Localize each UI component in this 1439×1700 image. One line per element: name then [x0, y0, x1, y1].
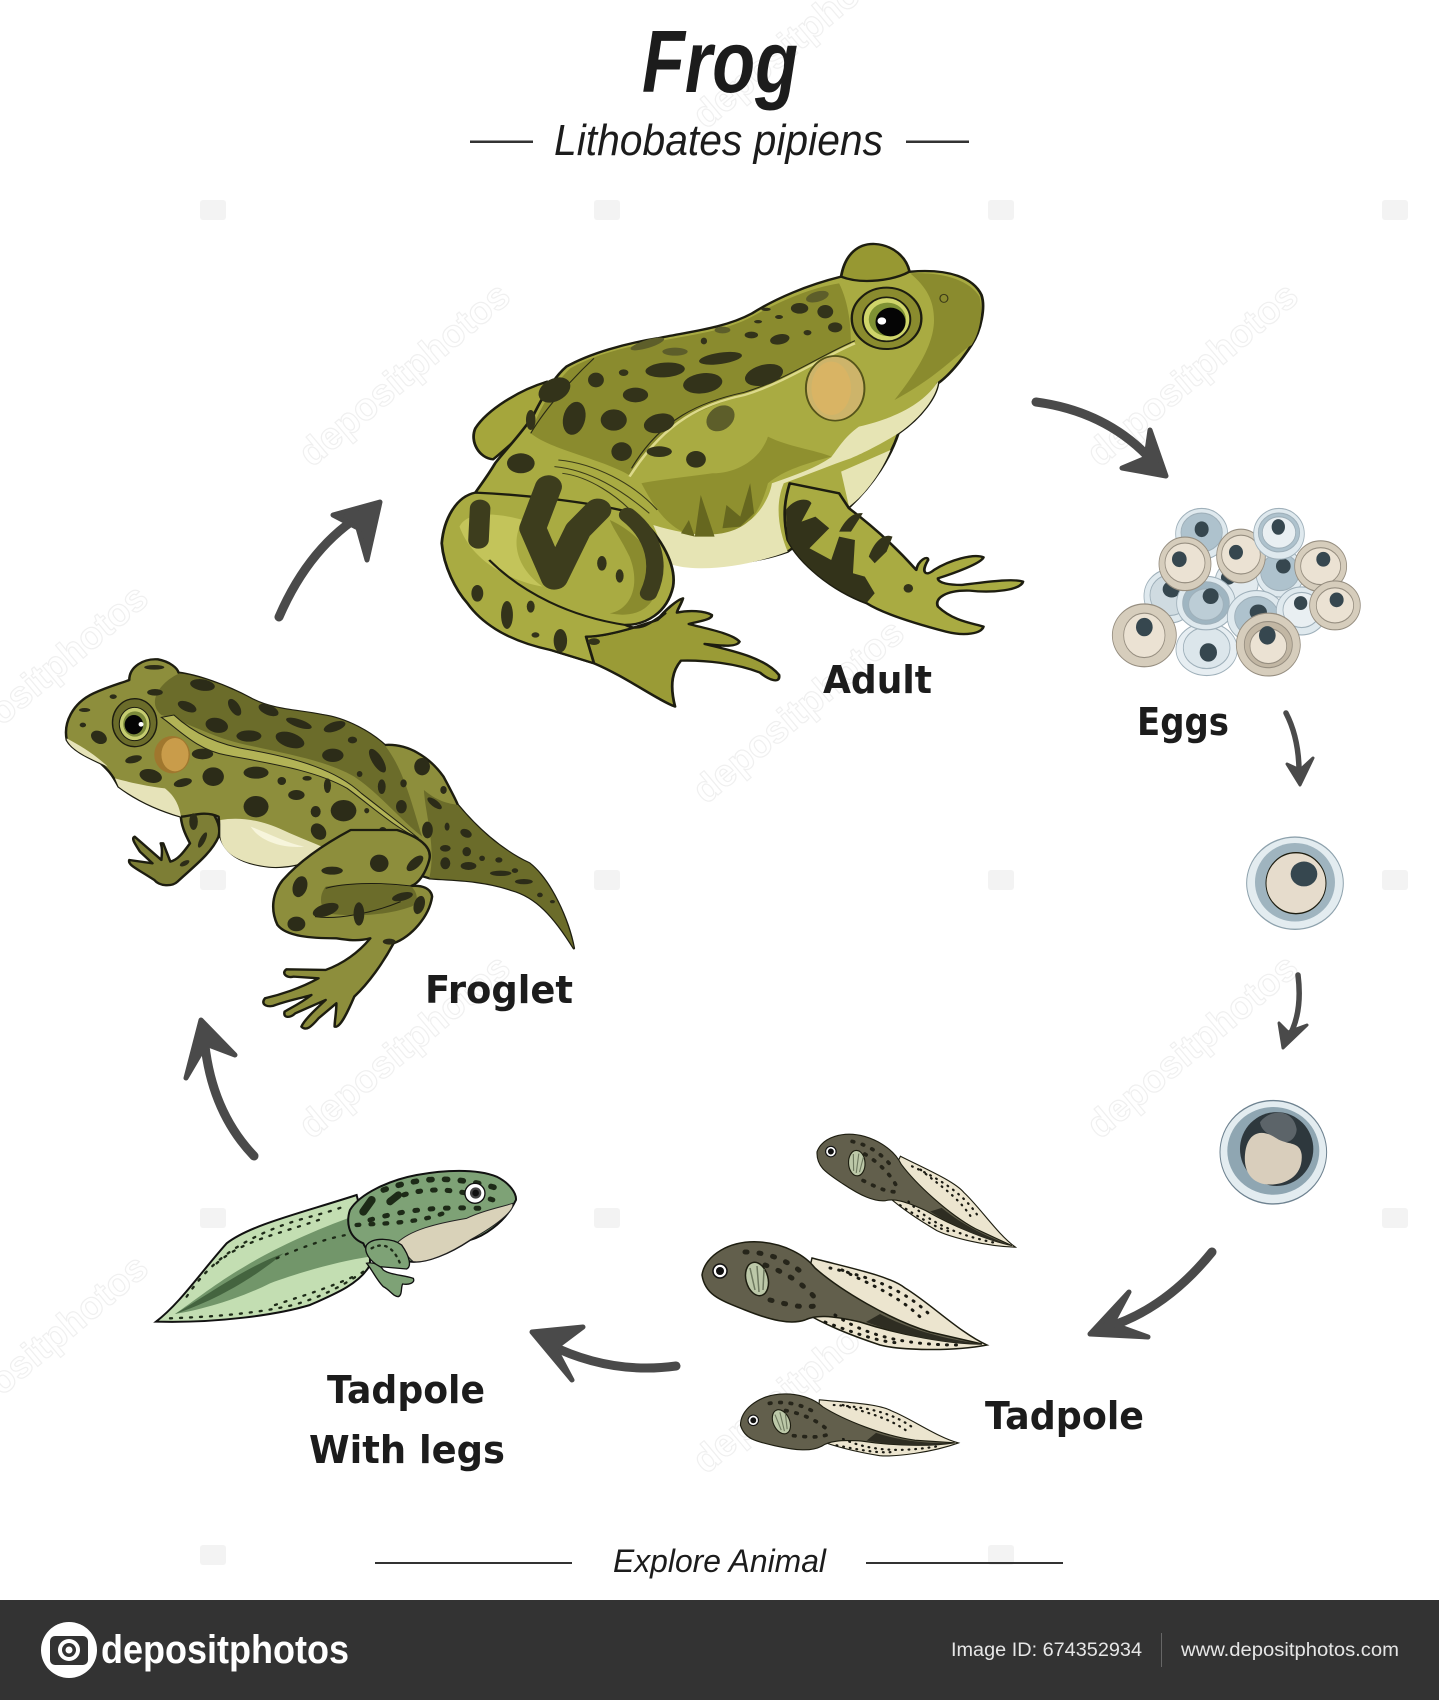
- tadpole: upper: [806, 1127, 1031, 1250]
- tail specks: [170, 1207, 363, 1318]
- front arm and hand: [785, 483, 1023, 634]
- tympanum: [806, 356, 864, 421]
- body: [66, 659, 574, 948]
- arrow: tadpole with legs to froglet: [186, 1020, 254, 1156]
- belly: [397, 1203, 513, 1262]
- head shading: [894, 273, 981, 400]
- tadpole group: [702, 1127, 1031, 1480]
- image id: Image ID: 674352934: [951, 1640, 1142, 1661]
- eye: [465, 1183, 485, 1203]
- arrow: single egg to embryo: [1279, 975, 1307, 1048]
- arm spots: [179, 813, 209, 868]
- far hip: [474, 382, 547, 459]
- arrow: adult to eggs: [1036, 402, 1166, 476]
- tadpole: lower: [737, 1367, 959, 1480]
- arrow: tadpole to tadpole with legs: [532, 1327, 676, 1380]
- thigh light shading: [460, 515, 543, 587]
- hind leg: [367, 1263, 414, 1297]
- froglet spots: [79, 665, 555, 903]
- eye: [852, 288, 921, 349]
- throat and belly cream: [653, 382, 938, 568]
- leg spots: [287, 853, 427, 945]
- label: Tadpole With legs: [309, 1368, 505, 1472]
- infographic: frog life cycle: depositphotos: [1079, 946, 1306, 1147]
- subtitle with rules: Lithobates pipiens: [554, 116, 883, 165]
- tympanum: [154, 736, 190, 773]
- tail fin: [156, 1195, 370, 1322]
- arrow: embryo to tadpoles: [1090, 1252, 1212, 1337]
- blue eggs: [1144, 508, 1327, 676]
- eye: [112, 699, 157, 747]
- eggs cluster: [1112, 508, 1360, 676]
- eye bump: [841, 244, 910, 281]
- arrow: eggs to single egg: [1286, 713, 1313, 785]
- thigh and shin: [442, 493, 674, 663]
- label: Froglet: Froglet: [425, 968, 573, 1012]
- thigh stripes: [479, 487, 655, 593]
- body spots: [357, 1179, 503, 1225]
- dorsolateral light stripe: [161, 715, 419, 838]
- froglet illustration: [66, 659, 574, 1029]
- label: Tadpole With legs: With legs: [309, 1428, 505, 1472]
- footer tagline: Explore Animal: [613, 1543, 827, 1579]
- logo wordmark: depositphotos: [101, 1628, 349, 1672]
- title: Frog: [642, 12, 798, 111]
- hip wrinkles: [554, 460, 657, 513]
- body spots: [507, 303, 842, 473]
- foot: [550, 598, 779, 707]
- infographic: frog life cycle: depositphotos: [1079, 274, 1306, 475]
- embryo egg: [1220, 1101, 1327, 1204]
- tail muscle: [175, 1215, 370, 1314]
- tadpole with legs: [156, 1171, 516, 1322]
- infographic: frog life cycle: depositphotos: [685, 611, 912, 812]
- logo icon: [41, 1622, 97, 1678]
- faded spots: [629, 289, 831, 436]
- single egg: [1247, 837, 1343, 929]
- site url: www.depositphotos.com: [1180, 1640, 1399, 1661]
- front arm: [129, 800, 219, 885]
- label: Eggs: Eggs: [1137, 700, 1229, 744]
- arm stripes: [786, 500, 893, 603]
- throat: [67, 738, 181, 817]
- infographic: frog life cycle: depositphotos: [291, 274, 518, 475]
- belly fingers: [681, 483, 754, 537]
- front beige eggs: [1112, 541, 1360, 676]
- belly: [220, 819, 326, 867]
- infographic: frog life cycle: depositphotos: [291, 946, 518, 1147]
- infographic: frog life cycle: depositphotos: [685, 1281, 912, 1482]
- tail and back shading: [155, 673, 422, 837]
- lateral light line: [630, 343, 855, 477]
- adult frog illustration: [442, 244, 1023, 707]
- arrow: froglet to adult: [279, 502, 380, 617]
- side shading: [641, 437, 831, 540]
- back shading: [531, 283, 851, 477]
- pale top egg: [1254, 508, 1304, 559]
- label: Tadpole: Tadpole: [985, 1394, 1144, 1438]
- label: Adult: Adult: [823, 658, 932, 702]
- hind leg and foot: [263, 830, 432, 1029]
- leg spots: [471, 556, 624, 652]
- label: Tadpole With legs: Tadpole: [327, 1368, 485, 1412]
- nostril: [940, 294, 948, 302]
- watermark footer bar: [0, 1600, 1439, 1700]
- tadpole: middle: [702, 1242, 987, 1350]
- body: [475, 271, 983, 564]
- body: [348, 1171, 516, 1262]
- beige eggs: [1159, 529, 1265, 591]
